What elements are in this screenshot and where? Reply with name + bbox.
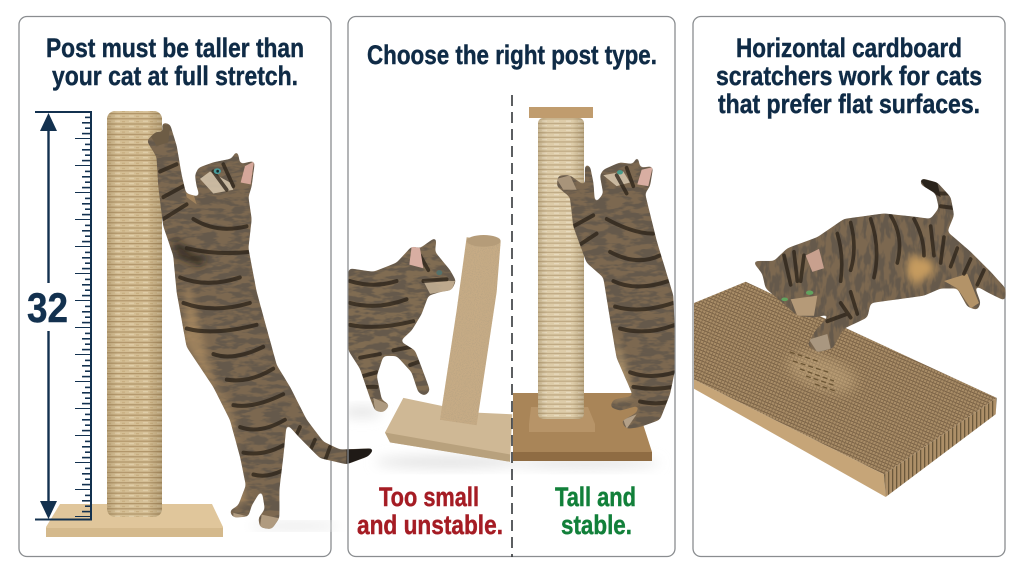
- panel frame: [348, 16, 675, 556]
- heading: your cat at full stretch.: [52, 61, 298, 91]
- floor shadow: [250, 521, 340, 531]
- panel frame: [19, 16, 331, 556]
- heading: Post must be taller than: [46, 33, 304, 63]
- height number: 32: [27, 284, 68, 331]
- cat ear and eye: [409, 246, 442, 275]
- height arrow: [40, 113, 57, 519]
- panel frame: [693, 16, 1005, 556]
- shadows under bases: [342, 407, 660, 468]
- label: tall and stable: [555, 482, 636, 540]
- cat ear and eye: [214, 161, 254, 184]
- heading: Horizontal cardboard: [736, 33, 962, 63]
- fur stripes: [350, 256, 447, 387]
- height ruler: [35, 111, 92, 520]
- tall stable sisal post: [513, 107, 652, 461]
- heading: that prefer flat surfaces.: [718, 89, 980, 119]
- cat sniffing short post: [348, 239, 456, 412]
- fur stripes: [573, 168, 675, 403]
- fur stripes: [160, 164, 330, 476]
- cat ear and eye: [617, 167, 653, 186]
- panel: horizontal scratcher: [693, 16, 1007, 556]
- short unstable carpet post: [385, 234, 512, 462]
- label: too small: Too small: [379, 482, 479, 512]
- cat lying on board: [751, 175, 1007, 354]
- cardboard scratcher board: [694, 282, 997, 497]
- heading: Choose the right post type.: [367, 40, 657, 70]
- fur stripes: [784, 193, 984, 321]
- panel: post height: [19, 16, 380, 556]
- label: tall and stable: Tall and: [555, 482, 636, 512]
- panel: post type: [342, 16, 678, 557]
- cat ear and eyes: [781, 249, 824, 301]
- heading: scratchers work for cats: [716, 61, 982, 91]
- label: too small: [357, 482, 503, 540]
- cat stretching on post: [148, 123, 372, 529]
- divider dashed line: [511, 95, 513, 557]
- scratching post with wooden base: [46, 111, 223, 537]
- heading: [46, 33, 304, 91]
- label: tall and stable: stable.: [561, 510, 632, 540]
- heading: [716, 33, 982, 119]
- label: too small: and unstable.: [357, 510, 503, 540]
- cat climbing tall post: [553, 153, 678, 434]
